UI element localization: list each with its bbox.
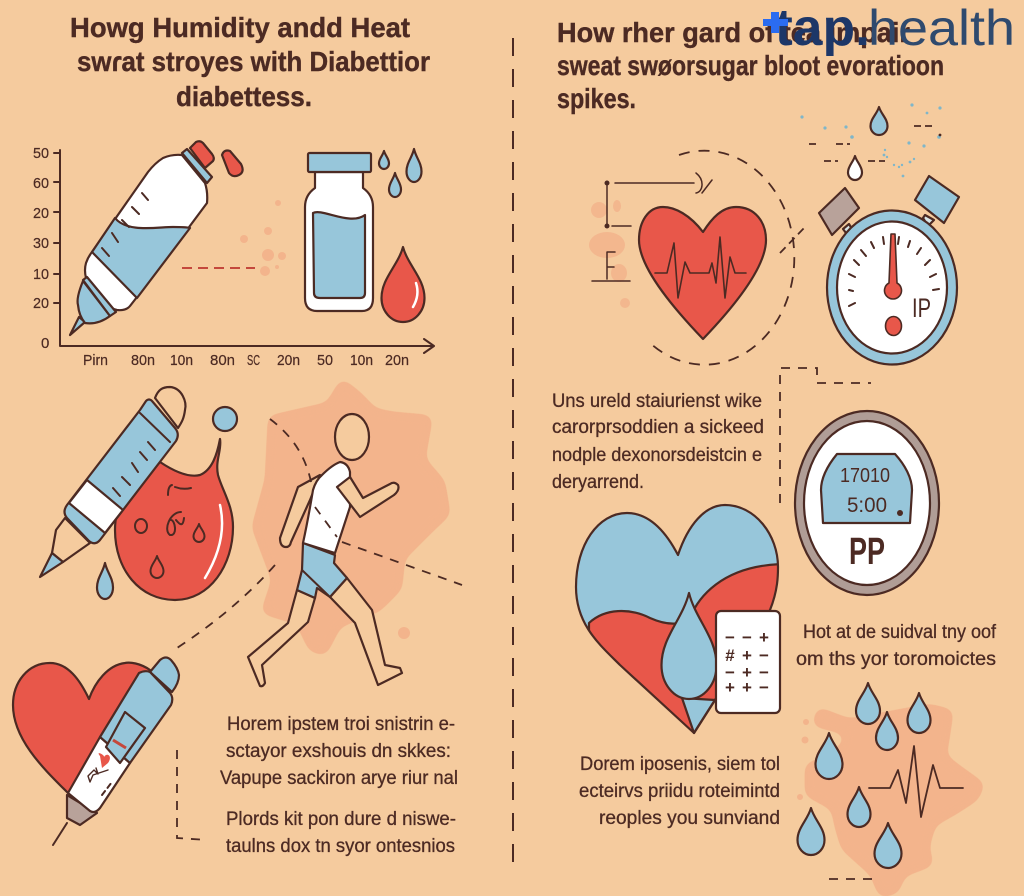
x axis labels: 20n — [277, 352, 300, 369]
icon: stopwatch gauge — [819, 176, 959, 364]
icon: evaporation drops and dots — [800, 103, 942, 180]
x axis labels: 80n — [210, 352, 235, 369]
left text block: Vapupe sackiron arye riur nal — [220, 768, 458, 789]
y axis labels: 50 — [33, 145, 49, 162]
icon: blue circle — [213, 407, 237, 431]
left title — [70, 12, 430, 112]
right middle text: om ths yor toromoictes — [796, 649, 996, 670]
right upper text block: carorprsoddien a sickeed — [552, 417, 764, 438]
left text block: sctayor exshouis dn skkes: — [226, 741, 451, 762]
right upper text block: Uns ureld staiurienst wike — [552, 391, 762, 412]
left title: Howg Humidity andd Heat — [70, 12, 410, 43]
note card: + — [725, 678, 735, 697]
x axis labels: Pirn — [83, 352, 108, 369]
right lower text: ecteirvs priidu roteimintd — [579, 781, 780, 802]
sweat drops with pulse line — [797, 683, 980, 893]
y axis labels: 20 — [33, 205, 49, 222]
note card: − — [725, 663, 735, 682]
icon: small blue drop — [97, 563, 113, 599]
y axis labels: 60 — [33, 175, 49, 192]
logo: tap.health: health — [868, 0, 1015, 56]
icon: red blood drop — [382, 247, 424, 322]
center dashed divider — [512, 38, 514, 870]
icon: glucose meter: 5:00 — [847, 494, 887, 517]
y axis labels: 0 — [41, 335, 49, 352]
right middle text: Hot at de suidval tny oof — [803, 622, 997, 643]
right lower text: Dorem iposenis, siem tol — [580, 754, 780, 775]
left title: swɾat stroyes with Diabettior — [77, 46, 430, 77]
dashed elbow connector — [780, 368, 871, 503]
icon: glucose meter: PP — [849, 531, 885, 573]
note card: − — [725, 628, 735, 647]
dashed ring around heart — [650, 151, 805, 365]
y axis labels: 30 — [33, 235, 49, 252]
y axis labels — [33, 145, 49, 352]
note card: − — [759, 646, 769, 665]
note card: + — [742, 663, 752, 682]
note card: − — [759, 678, 769, 697]
right title: How rher gard of tea impair — [557, 17, 910, 48]
icon: jar — [305, 153, 373, 311]
x axis labels: 10n — [350, 352, 373, 369]
note card — [716, 611, 780, 713]
dashed connectors around runner — [177, 419, 462, 648]
right middle text — [796, 622, 997, 670]
icon: heart with ECG line — [639, 207, 766, 339]
logo: tap.health — [763, 0, 1015, 57]
left text block: taulns dox tn syor ontesnios — [226, 836, 455, 857]
left text block — [220, 714, 458, 857]
x axis labels: 10n — [170, 352, 193, 369]
right upper text block: nodple dexonorsdeistcin e — [552, 445, 762, 466]
icon: stopwatch gauge: IP — [912, 293, 931, 323]
runner with splash — [248, 385, 445, 686]
note card: + — [742, 678, 752, 697]
right upper text block: deryarrend. — [552, 472, 644, 493]
icon: blue and red heart — [576, 505, 785, 740]
icon: heart with insulin pen — [13, 658, 179, 845]
right lower text: reoples you sunviand — [599, 808, 780, 829]
left text block: Plords kit pon dure d niswe- — [226, 809, 456, 830]
icon: tilted bottle — [70, 141, 243, 335]
dashed bracket — [177, 750, 207, 840]
note card: − — [759, 663, 769, 682]
x axis labels: 20n — [385, 352, 409, 369]
right lower text — [579, 754, 780, 829]
logo: tap.health: tap. — [775, 0, 870, 57]
peach spots with red dashes — [182, 200, 286, 276]
note card: − — [742, 628, 752, 647]
icon: blood blob — [115, 439, 233, 600]
left text block: Horem ipstем trоi snistrin e- — [227, 714, 455, 735]
right title: spikes. — [557, 83, 636, 114]
note card: + — [742, 646, 752, 665]
icon: glucose meter: 17010 — [840, 465, 890, 487]
icon: syringe — [40, 387, 185, 577]
annotation lines and spots — [589, 173, 712, 308]
right title — [557, 17, 944, 114]
y axis labels: 10 — [33, 266, 49, 283]
x axis labels — [83, 352, 409, 369]
note card: + — [759, 628, 769, 647]
x axis labels: 80n — [131, 352, 155, 369]
note card: # — [725, 646, 735, 665]
chart axes — [54, 150, 434, 353]
right title: sweat swøorsugar bloot evoratioon — [557, 50, 944, 81]
y axis labels: 20 — [33, 295, 49, 312]
left title: diabettess. — [176, 81, 312, 112]
right upper text block — [552, 391, 764, 493]
icon: glucose meter — [795, 411, 939, 595]
x axis labels: SC — [247, 352, 260, 369]
icon: small water drops — [379, 149, 422, 197]
x axis labels: 50 — [317, 352, 333, 369]
